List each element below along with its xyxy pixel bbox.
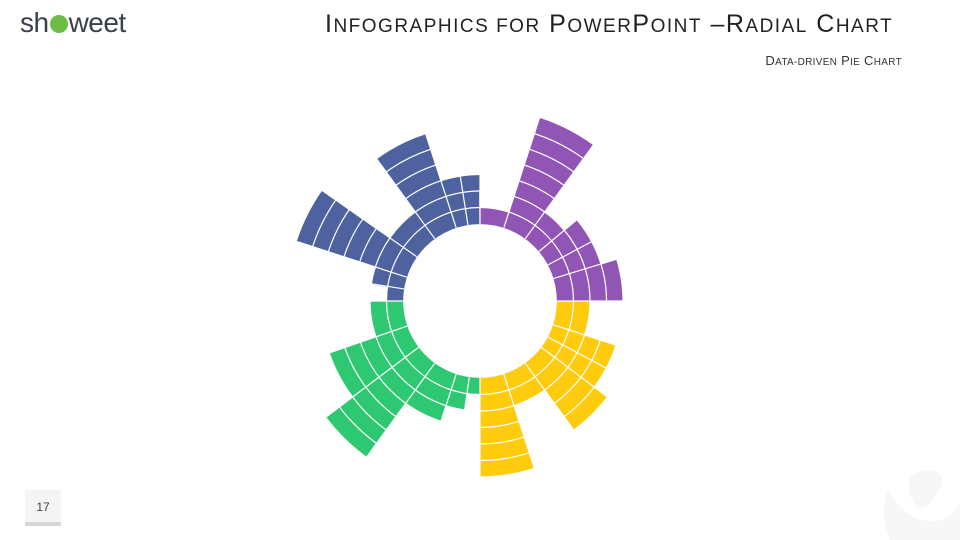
- watermark logo: [880, 460, 960, 540]
- subtitle: DATA-DRIVEN PIE CHART: [765, 53, 902, 68]
- page number: 17: [36, 500, 50, 514]
- quadrant: yellow: [312, 133, 648, 469]
- quadrant: green: [296, 117, 664, 485]
- page number: [25, 490, 61, 526]
- quadrant: blue: [296, 117, 664, 485]
- title: INFOGRAPHICS FOR POWERPOINT –RADIAL CHART: [325, 10, 893, 38]
- quadrant: purple: [296, 117, 664, 485]
- logo: sh weet: [20, 7, 126, 38]
